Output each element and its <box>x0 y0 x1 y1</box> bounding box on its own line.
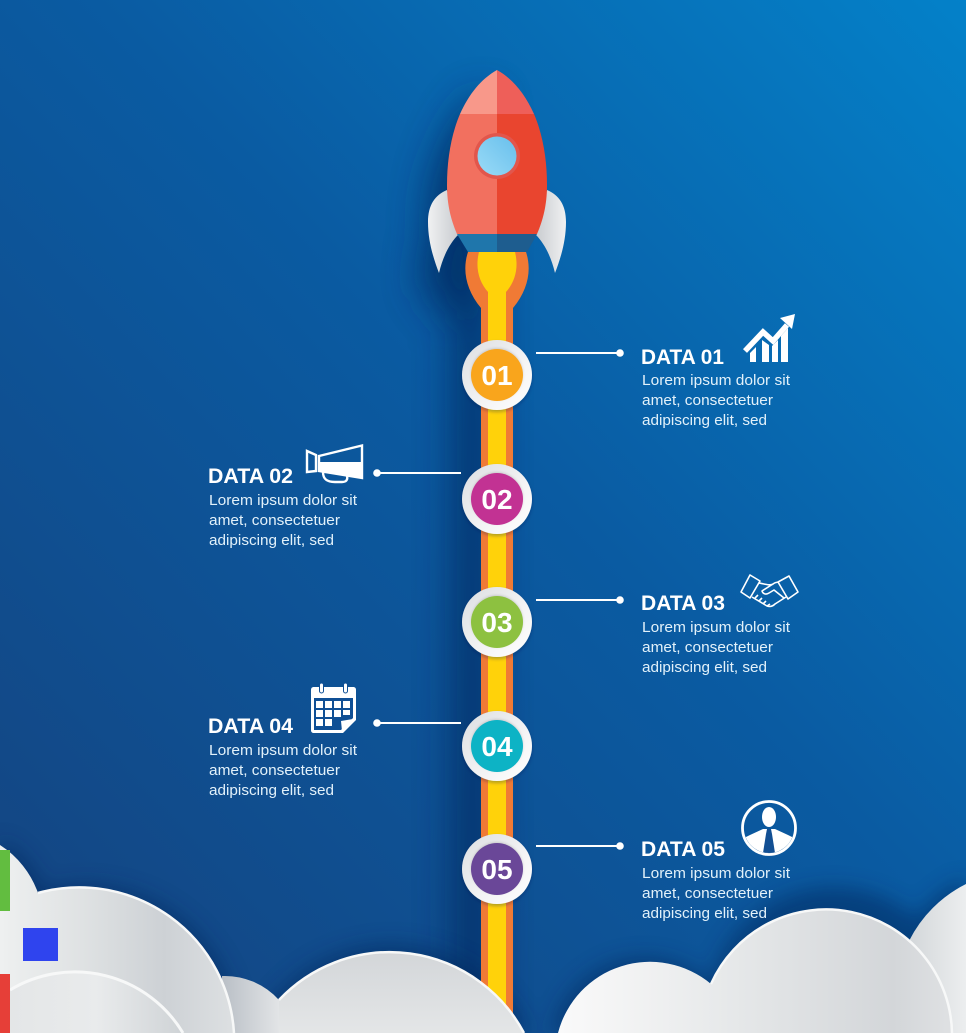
left fin <box>428 190 458 273</box>
shadow behind rocket and trail <box>420 95 492 1033</box>
step 03 badge: 03 <box>481 607 513 638</box>
data 05 text: Lorem ipsum dolor sit <box>642 865 791 882</box>
cloud: far right <box>900 884 966 1033</box>
icon: businessman <box>742 802 796 860</box>
icon: calendar <box>311 683 356 733</box>
step 05 badge: 05 <box>481 854 513 885</box>
icon: growth chart <box>745 314 795 362</box>
data 03 text: DATA 03 <box>641 592 725 615</box>
step 02 badge: 02 <box>481 484 513 515</box>
data 04 text: amet, consectetuer <box>209 762 340 779</box>
cloud: left inner <box>10 972 183 1033</box>
data 05 text: DATA 05 <box>641 838 725 861</box>
data 04 text: adipiscing elit, sed <box>209 782 334 799</box>
connector 04 <box>373 719 461 727</box>
step 04 badge: 04 <box>481 731 513 762</box>
data 03 text: Lorem ipsum dolor sit <box>642 619 791 636</box>
rocket trail <box>481 290 513 1016</box>
rocket <box>428 70 566 325</box>
data 02 text: adipiscing elit, sed <box>209 532 334 549</box>
icon: megaphone <box>307 446 362 482</box>
shadow behind clouds <box>0 840 966 1033</box>
cloud: center <box>279 952 524 1033</box>
data 05 text: adipiscing elit, sed <box>642 905 767 922</box>
cloud: back center small <box>222 976 279 1033</box>
connector 03 <box>536 596 624 604</box>
data 03 text: amet, consectetuer <box>642 639 773 656</box>
data 02 text: Lorem ipsum dolor sit <box>209 492 358 509</box>
step 03 badge <box>462 587 532 657</box>
data 02 text: DATA 02 <box>208 465 293 488</box>
connector 02 <box>373 469 461 477</box>
data 01 text <box>641 346 791 429</box>
data 05 text <box>641 838 791 922</box>
data 05 text: amet, consectetuer <box>642 885 773 902</box>
data 04 text: Lorem ipsum dolor sit <box>209 742 358 759</box>
cloud: right pair <box>558 909 952 1033</box>
data 04 text: DATA 04 <box>208 715 293 738</box>
connector 01 <box>536 349 624 357</box>
step 01 badge: 01 <box>481 360 513 391</box>
right fin <box>536 190 566 273</box>
step 02 badge <box>462 464 532 534</box>
rocket window <box>474 133 520 179</box>
data 04 text <box>208 715 358 799</box>
step 04 badge <box>462 711 532 781</box>
data 02 text <box>208 465 358 549</box>
blue marker <box>23 928 58 961</box>
cloud: left large <box>0 845 234 1033</box>
icon: handshake <box>741 575 798 606</box>
data 02 text: amet, consectetuer <box>209 512 340 529</box>
rocket flame <box>465 252 529 325</box>
green marker <box>0 850 10 911</box>
rocket body <box>447 70 547 234</box>
step 01 badge <box>462 340 532 410</box>
data 01 text: Lorem ipsum dolor sit <box>642 372 791 389</box>
red marker <box>0 974 10 1033</box>
data 01 text: DATA 01 <box>641 346 724 369</box>
connector 05 <box>536 842 624 850</box>
data 01 text: amet, consectetuer <box>642 392 773 409</box>
rocket skirt <box>457 234 537 252</box>
data 01 text: adipiscing elit, sed <box>642 412 767 429</box>
data 03 text <box>641 592 791 676</box>
step 05 badge <box>462 834 532 904</box>
data 03 text: adipiscing elit, sed <box>642 659 767 676</box>
